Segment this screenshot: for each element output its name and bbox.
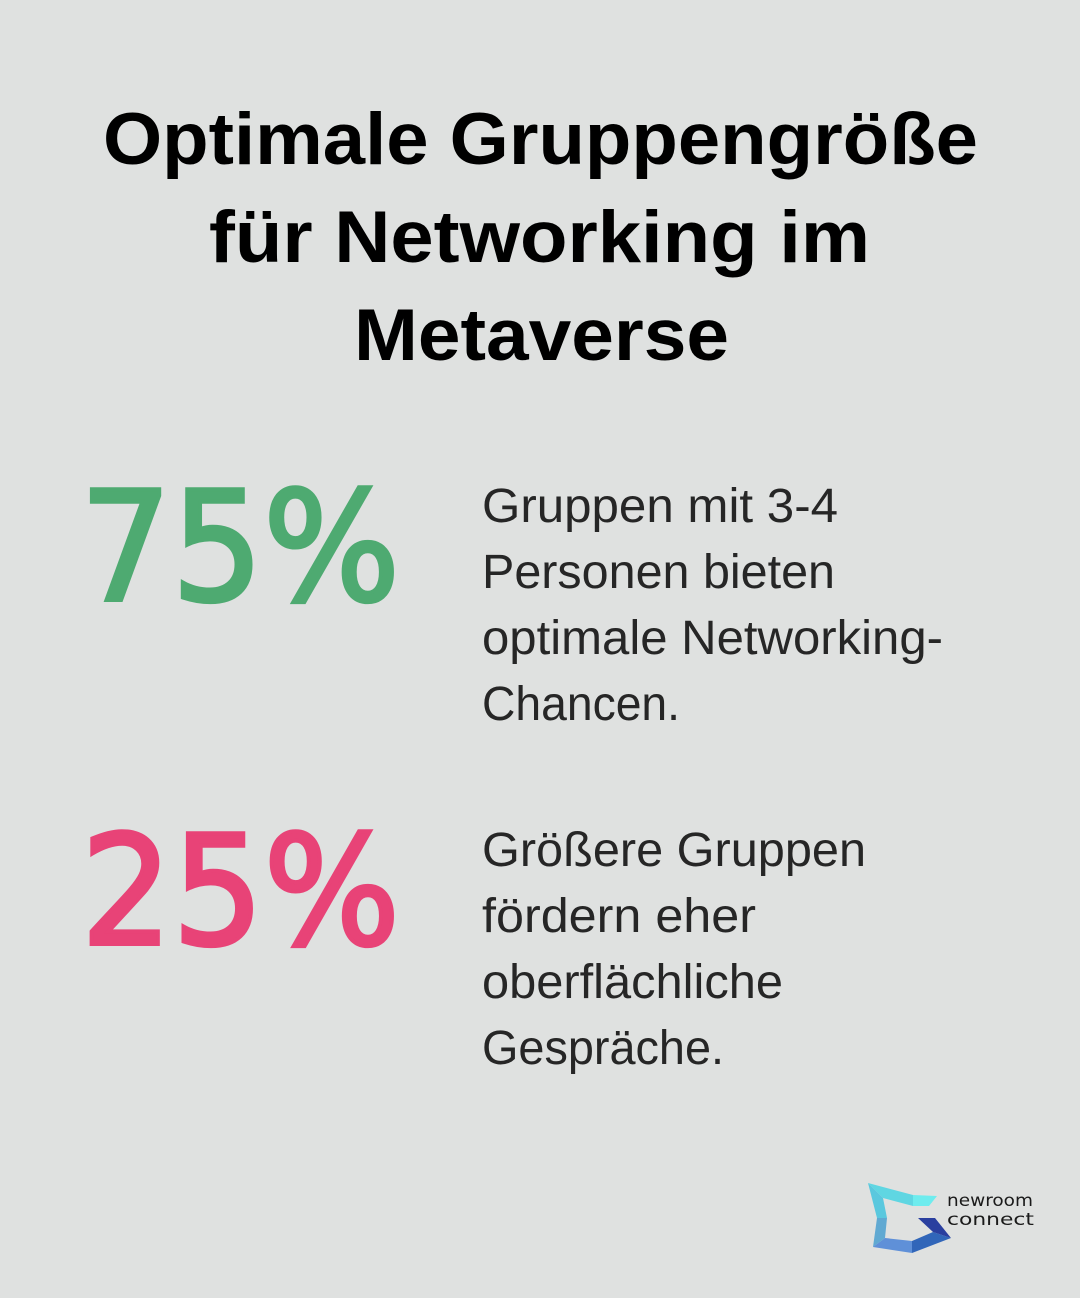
text block: 3-4 person groups: optimale Networking- [482, 612, 943, 665]
text block: 3-4 person groups [482, 480, 943, 731]
title: für Networking im [209, 197, 870, 278]
text block: 3-4 person groups: Personen bieten [482, 546, 835, 599]
statistic: 75%: 75% [80, 459, 400, 636]
text block: larger groups: fördern eher [482, 890, 756, 943]
logo wordmark [947, 1191, 1034, 1230]
title [103, 99, 978, 376]
text block: 3-4 person groups: Gruppen mit 3-4 [482, 480, 838, 533]
text block: 3-4 person groups: Chancen. [482, 678, 680, 731]
statistic: 25%: 25% [81, 803, 400, 980]
logo: newroom connect [868, 1183, 1034, 1253]
title: Metaverse [354, 295, 729, 376]
logo wordmark: connect [947, 1210, 1034, 1230]
text block: larger groups: oberflächliche [482, 956, 783, 1009]
text block: larger groups [482, 824, 866, 1075]
text block: larger groups: Größere Gruppen [482, 824, 866, 877]
text block: larger groups: Gespräche. [482, 1022, 724, 1075]
icon: logo mark [868, 1183, 951, 1253]
title: Optimale Gruppengröße [103, 99, 978, 180]
logo wordmark: newroom [947, 1191, 1033, 1211]
